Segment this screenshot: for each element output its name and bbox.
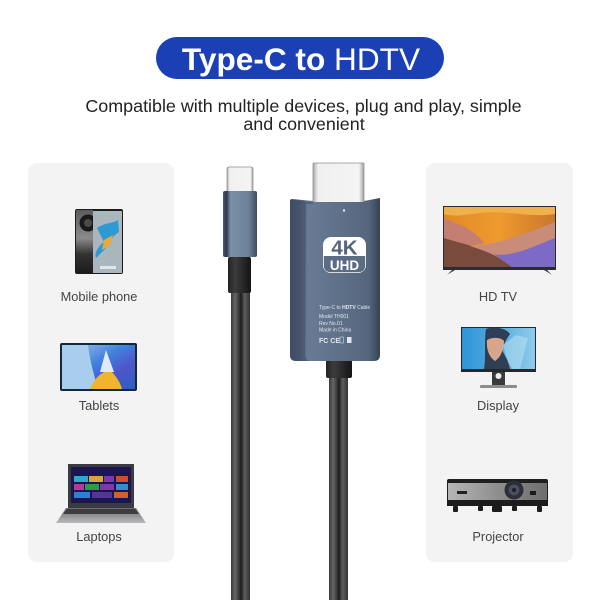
strain relief [228, 257, 251, 293]
indicator light [343, 209, 345, 212]
product label text: Type-C to HDTV Cable [319, 305, 370, 311]
strain relief [326, 360, 352, 378]
badge: 4K UHD: UHD [330, 258, 359, 273]
icon: tablet [60, 343, 137, 391]
panel: right devices [426, 163, 573, 562]
icon: HD TV [443, 206, 556, 275]
Type-C cable [223, 167, 257, 600]
product label text: Rev No.01 [319, 321, 343, 327]
product label text: Model TH001 [319, 314, 349, 320]
cable cord [231, 290, 250, 600]
badge: 4K UHD [323, 236, 366, 273]
label: laptops: Laptops [76, 529, 122, 544]
label: HD TV: HD TV [479, 289, 518, 304]
housing inner shoulder [290, 200, 313, 361]
product label text: Made in China [319, 328, 351, 334]
title: Type-C to HDTV [182, 41, 420, 77]
HDMI metal plug [313, 163, 364, 203]
HDMI housing [290, 198, 380, 361]
icon: laptop [56, 464, 146, 523]
subtitle: and convenient [243, 114, 365, 134]
label: mobile phone: Mobile phone [61, 289, 137, 304]
cable cord [329, 375, 348, 600]
badge: 4K UHD: 4K [331, 236, 358, 260]
label: display: Display [477, 398, 520, 413]
product label text [319, 305, 370, 345]
icon: projector [447, 479, 548, 512]
Type-C housing [223, 191, 257, 257]
HDMI cable [290, 163, 380, 600]
product label text: FC CE [319, 338, 340, 345]
panel: left devices [28, 163, 174, 562]
icon: display [461, 327, 536, 388]
label: tablets: Tablets [79, 398, 119, 413]
icon: mobile phone [75, 209, 123, 274]
Type-C metal plug [227, 167, 253, 193]
label: projector: Projector [472, 529, 524, 544]
subtitle: Compatible with multiple devices, plug and play, simple [85, 96, 522, 116]
